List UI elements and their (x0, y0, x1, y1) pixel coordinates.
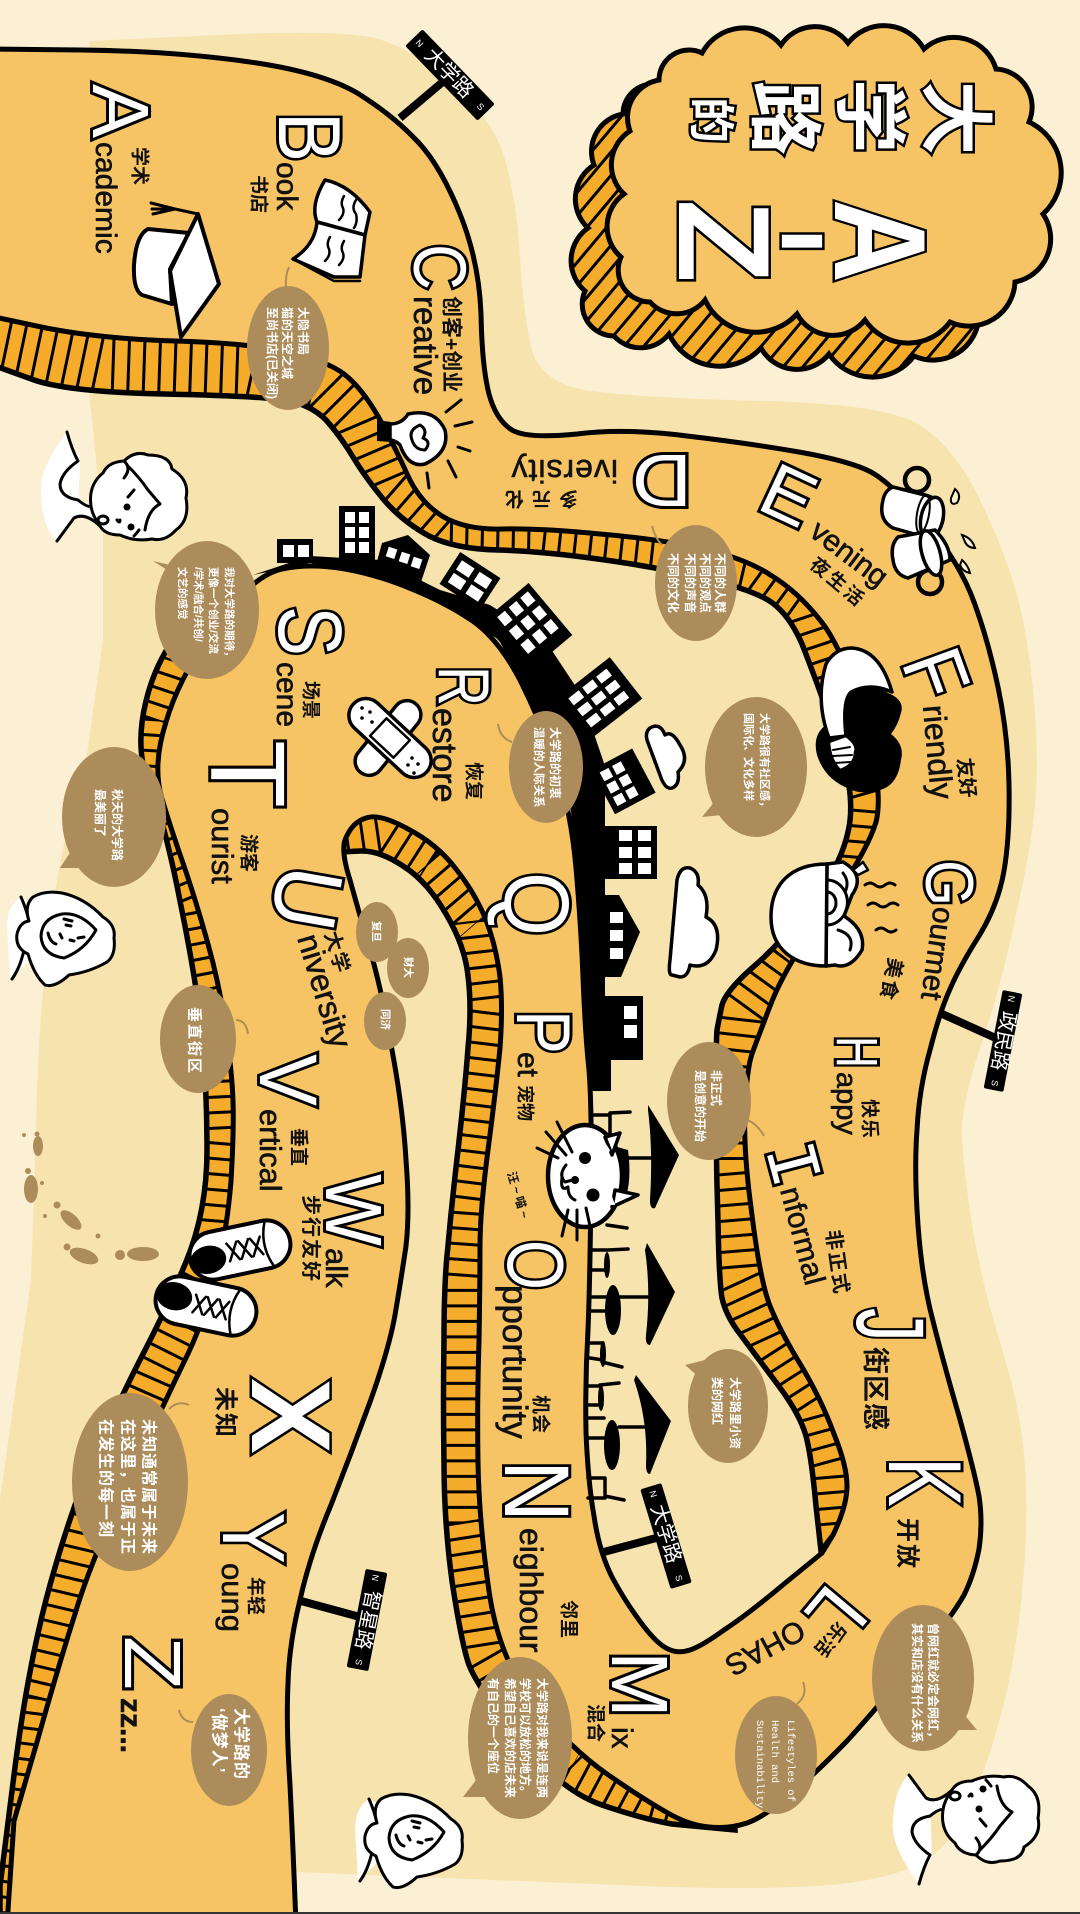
title text: 路 (742, 81, 826, 155)
letter O: Opportunity: O (491, 1240, 580, 1290)
bubble: unknown: 在发生的每一刻 (96, 1419, 116, 1538)
letter F: Friendly (884, 636, 988, 801)
bubble: unknown: 在这里，也属于正 (118, 1419, 138, 1555)
title cloud (571, 26, 1061, 377)
letter Y: Young: oung (215, 1563, 250, 1632)
bubble: autumn: 秋天的大学路 (110, 789, 125, 861)
letter E: Evening: vening (804, 514, 894, 594)
bubble: Tongji: 同济 (379, 1009, 392, 1030)
icon: open book (293, 180, 370, 281)
letter V: Vertical: 垂直 (288, 1128, 310, 1166)
letter E: Evening: 夜生活 (805, 552, 871, 612)
letter S: Scene (259, 606, 359, 727)
letter H: Happy: 快乐 (858, 1099, 880, 1139)
bubble: Lifestyles of Health and Sustainability: Lifestyles of (784, 1720, 796, 1802)
letter R: Restore: estore (425, 708, 463, 802)
bubble: expectation: 文艺的感觉 (176, 567, 189, 620)
title text: 学 (828, 79, 910, 153)
bubble: unknown: 未知通常属于未来 (140, 1419, 158, 1555)
skyline base (253, 556, 611, 1091)
letter A: Academic: A (76, 84, 165, 139)
title text: A (807, 199, 953, 283)
letter O: Opportunity: 机会 (530, 1395, 552, 1433)
street sign: 大学路 inner: S (673, 1574, 685, 1582)
bubble: diversity: 不同的声音 (683, 553, 698, 613)
letter J: Jiequ: 街区感 (860, 1347, 891, 1431)
letter N: Neighbour: eighbour (513, 1528, 549, 1653)
letter Q: Q (485, 872, 587, 936)
bubble: community: 大学路很有社区感， (758, 713, 772, 812)
letter O: Opportunity (491, 1240, 580, 1439)
street sign: 智星路: 智星路 (350, 1588, 385, 1652)
letter Y: Young: 年轻 (244, 1577, 268, 1615)
letter I: Informal: I (744, 1134, 835, 1197)
bubble: dreamers: 大学路的 (232, 1708, 252, 1780)
letter N: Neighbour: N (485, 1460, 587, 1522)
bubble: bookshops: 至尚书店(已关闭) (265, 307, 280, 399)
bubble: expectation: 更像一个创业/交流 (207, 567, 220, 654)
street sign: 政民路: 政民路 (986, 1009, 1021, 1073)
letter Y: Young: Y (204, 1512, 303, 1564)
title text: Z (651, 199, 797, 283)
street sign: 政民路: N (1006, 995, 1017, 1003)
bubble: autumn: 最美丽了 (93, 789, 108, 837)
bubble: neighbourhood: 大学路对我来说是连两 (535, 1678, 550, 1798)
letter G: Gourmet: 美食 (875, 956, 908, 1004)
letter S: Scene: 场景 (300, 681, 322, 719)
letter X: X (228, 1378, 353, 1454)
bubble: expectation: /学术/融合/共创/ (192, 567, 205, 642)
letter W: Walk: 步行友好 (299, 1195, 322, 1283)
letter L: LOHAS: 乐活 (810, 1617, 851, 1661)
letter U: University: 大学 (319, 928, 354, 977)
letter P: Pet: P (500, 1010, 585, 1054)
letter Z: Zzz: Z (108, 1636, 197, 1690)
bubble: community (702, 697, 807, 837)
bubble: Tongji (364, 992, 406, 1050)
letter P: Pet: 宠物 (515, 1085, 536, 1121)
bubble: bookshops (247, 267, 329, 410)
bubble: internet-famous: 其实和店没有什么关系 (910, 1623, 925, 1743)
icon: cat (537, 1122, 638, 1240)
street sign: 大学路 top: 大学路 (420, 44, 478, 103)
letter V: Vertical: ertical (253, 1109, 288, 1192)
bubble: neighbourhood: 有自己的一个座位 (486, 1678, 501, 1774)
letter K: Kaifang: 开放 (894, 1518, 920, 1570)
letter H: Happy (824, 1036, 889, 1139)
letter K: Kaifang: K (866, 1457, 982, 1507)
letter A: Academic: cademic (89, 142, 122, 254)
letter D: Diversity (497, 439, 692, 522)
letter C: Creative: C (398, 244, 481, 290)
letter T: Tourist: T (188, 740, 306, 808)
icon: band-aid (342, 691, 438, 785)
bubble: informal (667, 1042, 764, 1160)
icon: graduation cap (134, 203, 219, 337)
letter I: Informal (744, 1134, 853, 1297)
letter G: Gourmet: G (911, 860, 987, 906)
street sign: 政民路: S (989, 1079, 1000, 1087)
letter D: Diversity: iversity (510, 453, 618, 489)
letter E: Evening: E (748, 446, 829, 544)
bubble: SUFE (387, 938, 429, 998)
letter G: Gourmet: ourmet (914, 905, 960, 1003)
letter V: Vertical (242, 1054, 333, 1192)
letter W: Walk: alk (319, 1248, 354, 1288)
street sign: 大学路 top: N (414, 38, 425, 49)
letter G: Gourmet (875, 860, 987, 1004)
bubble: neighbourhood: 学校可以放松的地方。 (518, 1678, 533, 1798)
letter B: Book: B (260, 112, 359, 162)
letter I: Informal: nformal (773, 1183, 831, 1288)
letter Z: Zzz: zz... (114, 1698, 147, 1753)
bubble: informal: 是创意的开始 (693, 1070, 708, 1142)
letter N: Neighbour (485, 1460, 587, 1653)
bubble: Lifestyles of Health and Sustainability: Sustainability (753, 1720, 765, 1808)
letter F: Friendly: 友好 (952, 757, 980, 799)
letter K: Kaifang (866, 1457, 982, 1570)
bubble: diversity (652, 525, 737, 641)
title cloud hatched shadow (571, 60, 1025, 377)
letter D: Diversity: D (632, 439, 692, 522)
bubble: dreamers (179, 1694, 267, 1806)
letter S: Scene: cene (270, 662, 303, 727)
bubble: Fudan (356, 902, 398, 962)
letter Y: Young (204, 1512, 303, 1632)
striped road edge: left (0, 648, 231, 1912)
bubble: autumn (60, 747, 166, 887)
street sign: 智星路: N (370, 1574, 381, 1582)
letter J: Jiequ: J (826, 1303, 939, 1345)
bubble: dreamers: ‘做梦人’ (210, 1708, 228, 1773)
street sign: 大学路 top (400, 29, 495, 121)
letter L: LOHAS: L (789, 1570, 884, 1659)
icon: light bulb (377, 400, 472, 488)
bubble: Lifestyles of Health and Sustainability (735, 1682, 817, 1814)
letter V: Vertical: V (242, 1054, 333, 1106)
bubble: unknown (72, 1393, 189, 1571)
bubble: diversity: 不同的文化 (666, 553, 681, 613)
letter R: Restore: R (423, 666, 503, 706)
icon: sneakers (151, 1216, 295, 1340)
letter W: Walk: W (309, 1174, 398, 1246)
letter U: University (251, 859, 362, 1052)
letter Z: Zzz (108, 1636, 197, 1753)
title text (651, 79, 996, 320)
letter B: Book: ook (270, 162, 303, 211)
bubble: vertical block (160, 985, 248, 1093)
letter N: Neighbour: 邻里 (558, 1600, 580, 1638)
letter L: LOHAS (720, 1570, 884, 1682)
bubble: original intention: 温暖的人际关系 (532, 727, 546, 808)
street sign: 大学路 inner: 大学路 (646, 1502, 686, 1566)
letter W: Walk (299, 1174, 398, 1288)
letter O: Opportunity: pportunity (495, 1285, 534, 1439)
letter U: University: niversity (290, 930, 359, 1052)
bubble: bookshops: 大隐书局 (296, 307, 311, 355)
bubble: petty bourgeois: 大学路里小资 (728, 1377, 743, 1449)
bubble: internet-famous: 曾网红就必定会网红， (926, 1623, 941, 1743)
buildings (277, 506, 657, 1060)
person bottom right (893, 1775, 1039, 1884)
street sign: 大学路 inner (600, 1483, 693, 1589)
bubble: expectation: 我对大学路的期待， (223, 567, 236, 662)
icon: noodle bowl (771, 862, 898, 966)
letter T: Tourist: 游客 (238, 834, 260, 872)
letter F: Friendly: F (884, 636, 988, 711)
person left middle (7, 892, 114, 986)
bubble: informal: 非正式 (709, 1070, 724, 1106)
bubble: original intention: 大学路的初衷 (548, 727, 563, 799)
title text: - (775, 136, 829, 320)
street sign: 智星路 (301, 1569, 388, 1671)
letter I: Informal: 非正式 (821, 1228, 853, 1297)
letter M: Mix (584, 1651, 684, 1749)
street sign: 大学路 inner: N (647, 1489, 659, 1498)
title cloud front (607, 26, 1061, 343)
bubble: expectation (153, 541, 259, 679)
person bottom (355, 1794, 462, 1888)
letter T: Tourist: ourist (205, 808, 240, 884)
letter A: Academic (76, 84, 165, 254)
letter B: Book (248, 112, 359, 213)
title text: 大 (914, 81, 996, 155)
letter F: Friendly: riendly (916, 703, 960, 801)
bubble: SUFE: 财大 (402, 957, 415, 978)
bubble: neighbourhood (463, 1657, 572, 1819)
letter M: Mix: ix (605, 1727, 638, 1749)
letter R: Restore (423, 666, 503, 802)
icon: clouds (646, 726, 718, 977)
street sign: 智星路: S (353, 1658, 364, 1666)
bubble: Fudan: 复旦 (370, 921, 383, 942)
bubble: bookshops: 猫的天空之城 (280, 307, 295, 379)
letter M: Mix: 混合 (584, 1704, 606, 1742)
letter T: Tourist (188, 740, 306, 884)
title text: 的 (685, 97, 737, 143)
bubble: petty bourgeois: 类的网红 (710, 1377, 725, 1425)
letter L: LOHAS: OHAS (720, 1613, 810, 1682)
person top left (41, 432, 187, 541)
bubble: internet-famous (872, 1605, 977, 1751)
bubble: Lifestyles of Health and Sustainability: Health and (768, 1720, 780, 1783)
street sign: 大学路 top: S (475, 101, 486, 112)
bubble: neighbourhood: 希望自己喜欢的店未来 (503, 1678, 518, 1798)
striped road edge: central (335, 790, 735, 1830)
letter M: Mix: M (595, 1651, 684, 1718)
bubble: community: 国际化、文化多样 (742, 713, 756, 801)
letter D: Diversity: 多元化 (497, 488, 578, 510)
letter J: Jiequ (826, 1303, 939, 1431)
street sign: 政民路 (940, 990, 1024, 1092)
icon: hugging person (816, 648, 902, 792)
letter A: Academic: 学术 (128, 147, 152, 185)
letter C: Creative (398, 244, 481, 395)
striped road edge: upper and right (0, 290, 900, 1551)
letter H: Happy: H (824, 1036, 889, 1068)
letter E: Evening (748, 446, 894, 612)
letter B: Book: 书店 (248, 175, 270, 213)
letter C: Creative: 创客+创业 (440, 296, 464, 392)
cafe umbrellas, tables and chairs (588, 1105, 679, 1500)
footprints (22, 1132, 159, 1268)
icon: coffee cups (882, 468, 975, 594)
letter H: Happy: appy (830, 1072, 862, 1135)
cat sound text: 汪 ~ 喵 ~ (504, 1170, 532, 1220)
letter C: Creative: reative (407, 296, 444, 395)
bubble: original intention (498, 711, 583, 823)
letter X: 未知 (212, 1387, 238, 1439)
bubble: petty bourgeois (685, 1349, 768, 1463)
bubble: diversity: 不同的观点 (698, 553, 713, 613)
letter P: Pet (500, 1010, 585, 1121)
letter P: Pet: et (511, 1052, 544, 1078)
letter S: Scene: S (259, 606, 359, 656)
bubble: diversity: 不同的人群 (713, 553, 728, 613)
letter R: Restore: 恢复 (462, 762, 484, 800)
bubble: vertical block: 垂直街区 (186, 1007, 204, 1075)
letter U: University: U (251, 859, 362, 937)
